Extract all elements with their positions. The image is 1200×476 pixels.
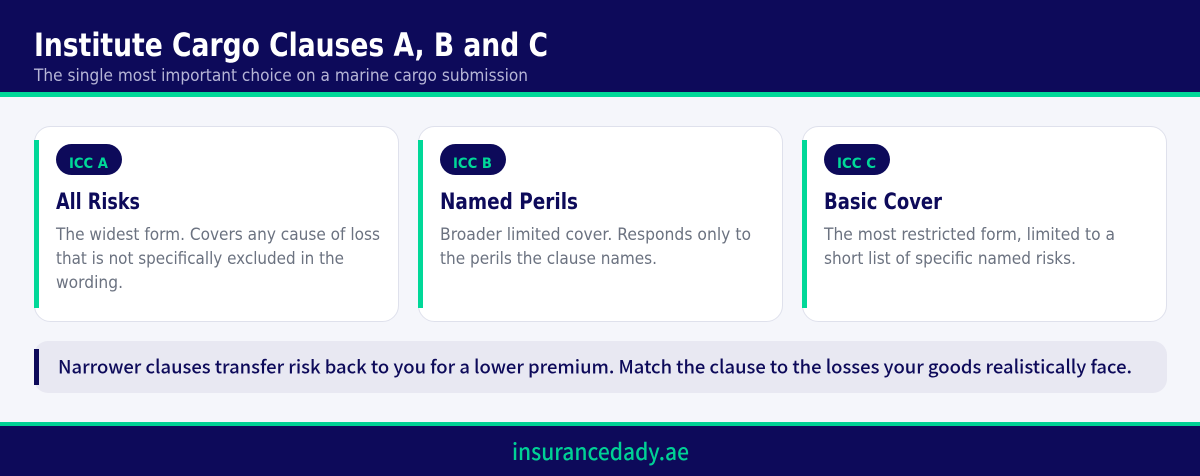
description: ICC C: short list of specific named risks. [824, 249, 1076, 269]
footer band [0, 422, 1200, 476]
description: ICC C: The most restricted form, limited to a [823, 225, 1115, 245]
badge: ICC C [824, 144, 890, 175]
footer site name: insurancedady.ae [512, 435, 689, 467]
heading: Named Perils: Named Perils [440, 190, 578, 215]
callout: Narrower clauses transfer risk back to you for a lower premium. Match the clause to the losses your goods realistically face. [58, 354, 1132, 380]
callout [34, 341, 1167, 393]
heading: All Risks: All Risks [56, 190, 140, 215]
badge: ICC C: ICC C [837, 156, 876, 172]
badge: ICC B [440, 144, 506, 175]
panel: ICC C [802, 126, 1166, 322]
panel: ICC B [418, 126, 782, 322]
description: ICC C [823, 225, 1115, 269]
header band [0, 0, 1200, 97]
description: ICC A: The widest form. Covers any cause of loss [55, 225, 380, 245]
panel: ICC A [34, 126, 398, 322]
description: ICC A [55, 225, 380, 293]
title: Institute Cargo Clauses A, B and C [34, 26, 548, 64]
description: ICC B [440, 225, 751, 269]
subtitle: The single most important choice on a marine cargo submission [33, 66, 528, 86]
badge: ICC B: ICC B [453, 156, 492, 172]
description: ICC B: Broader limited cover. Responds only to [440, 225, 751, 245]
description: ICC A: wording. [56, 273, 123, 293]
description: ICC B: the perils the clause names. [440, 249, 657, 269]
heading: Basic Cover: Basic Cover [824, 190, 942, 215]
badge: ICC A: ICC A [69, 156, 109, 172]
badge: ICC A [56, 144, 122, 175]
description: ICC A: that is not specifically excluded in the [56, 249, 344, 269]
